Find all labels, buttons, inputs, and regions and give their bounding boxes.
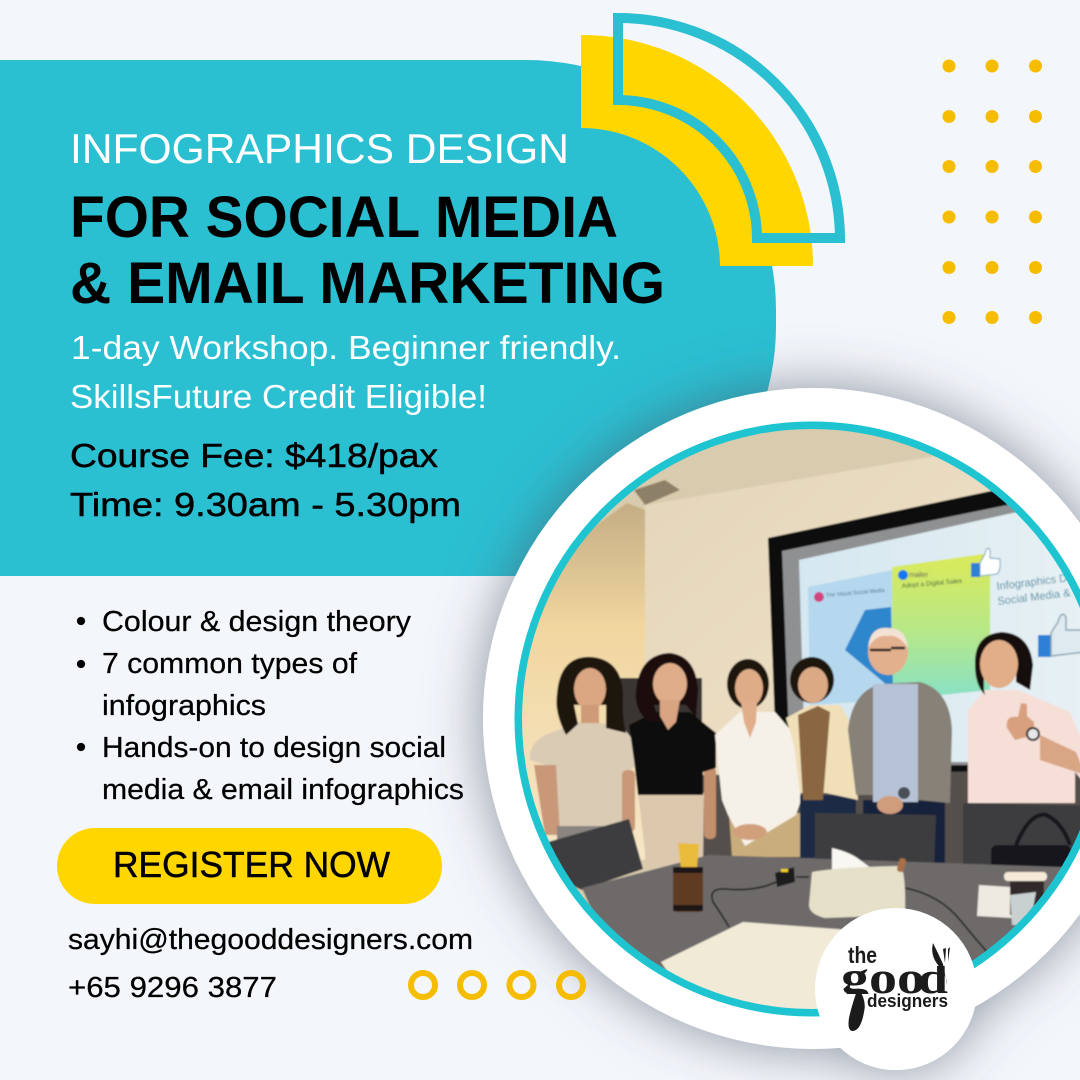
paper and cup [977, 872, 1047, 925]
teal photo ring [518, 426, 1080, 1012]
back wall below screen [702, 770, 1080, 865]
button: register now: REGISTER NOW [113, 844, 390, 885]
projection screen [768, 470, 1080, 780]
panel: teal header block [0, 60, 776, 576]
white pad [660, 921, 842, 1009]
course fee and time: Course Fee: $418/pax [70, 437, 439, 474]
logo: the good designers [841, 942, 950, 1031]
photo frame: white circles with shadow [483, 388, 1080, 1070]
chair back [618, 678, 702, 738]
tissue box [809, 848, 907, 918]
bullet list: Hands-on to design social [102, 732, 446, 764]
bullet list: 7 common types of [102, 648, 358, 680]
icon: yellow quarter arc [581, 35, 813, 266]
logo: the good designers: d [918, 952, 948, 1003]
projection screen: Social Media & I [997, 586, 1077, 608]
projection screen: The Visual Social Media [826, 588, 886, 599]
person 1 [530, 657, 640, 848]
bullet list: Colour & design theory [102, 606, 412, 638]
logo: the good designers: the [848, 942, 877, 968]
bullet list: infographics [102, 690, 266, 722]
ring row [411, 973, 583, 997]
title: & EMAIL MARKETING [70, 251, 665, 316]
pen holder [673, 843, 703, 912]
icon: g descender [848, 988, 865, 1031]
projection screen: Adopt a Digital Sales [902, 578, 963, 590]
title [70, 185, 665, 316]
photo: team in meeting room [510, 420, 1080, 1020]
person 2 [629, 653, 716, 867]
projection screen: mailer [909, 572, 929, 579]
person 3 [715, 659, 801, 857]
decorative dot grid [942, 60, 1042, 324]
icon: teal outlined quarter arc [618, 18, 840, 238]
course fee and time: Time: 9.30am - 5.30pm [70, 486, 461, 523]
contact details: sayhi@thegooddesigners.com [68, 924, 473, 956]
charger and cable [710, 866, 987, 952]
heading: infographics design: INFOGRAPHICS DESIGN [70, 125, 569, 172]
table [582, 854, 1062, 970]
projection screen: Infographics De [996, 572, 1074, 593]
button: register now [57, 828, 442, 904]
bullet list [77, 606, 464, 806]
contact details [68, 924, 473, 1004]
course fee and time [70, 437, 461, 523]
person 5 [848, 628, 952, 868]
contact details: +65 9296 3877 [68, 972, 277, 1004]
subtitle text: 1-day Workshop. Beginner friendly. [71, 329, 621, 366]
ceiling and walls [522, 429, 992, 908]
bag [991, 815, 1071, 875]
logo: the good designers: goo [841, 952, 925, 1003]
person 6 [968, 632, 1080, 803]
title: FOR SOCIAL MEDIA [70, 185, 618, 250]
person 4 [786, 657, 858, 858]
bullet list: media & email infographics [102, 774, 464, 806]
subtitle text: SkillsFuture Credit Eligible! [70, 378, 487, 415]
chairs [548, 803, 1080, 890]
logo circle top [815, 908, 977, 1070]
icon: feather stroke [932, 943, 950, 985]
logo: the good designers: designers [867, 991, 948, 1011]
subtitle text [70, 329, 621, 415]
